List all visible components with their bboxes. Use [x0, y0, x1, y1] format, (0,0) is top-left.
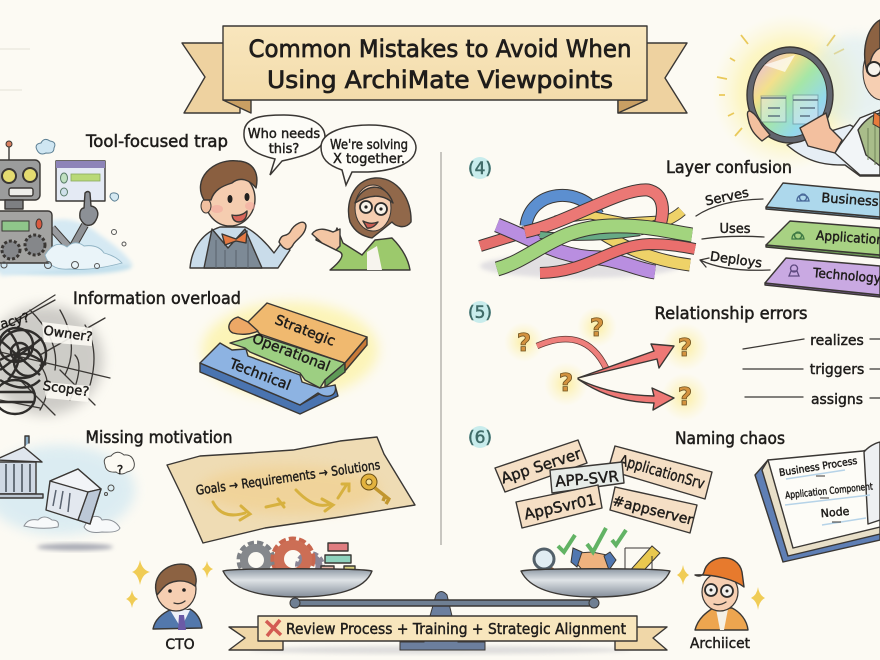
- label: architect: Archiicet: [690, 636, 750, 652]
- step number 6: (6): [468, 428, 492, 448]
- layer boards: [765, 183, 880, 297]
- bottom banner: [229, 616, 667, 650]
- puzzle labels: Operational: [250, 331, 332, 375]
- icon: tangled web of questions: [0, 295, 110, 415]
- step number 4: (4): [468, 159, 492, 179]
- right pan: [521, 569, 670, 597]
- icon: open reference book: Node: [820, 505, 850, 520]
- title banner: [182, 26, 687, 113]
- icon: tangled web of questions: Owner?: [42, 324, 93, 345]
- card: appsvr01: AppSvr01: [522, 491, 598, 523]
- panel: 6 naming chaos: [468, 426, 880, 562]
- puzzle labels: Technical: [226, 356, 293, 394]
- sparkles: [126, 560, 213, 608]
- relationship labels: assigns: [811, 392, 863, 408]
- icon: floating buildings: [0, 436, 135, 550]
- puzzle piece: operational: [230, 335, 345, 388]
- left pan: [223, 569, 372, 597]
- puzzle piece: technical: [200, 363, 338, 414]
- card: applicationsrv: ApplicationSrv: [617, 451, 707, 493]
- speech bubble: who needs this: [244, 115, 325, 175]
- question mark glows: [504, 307, 709, 421]
- heading: tool-focused trap: Tool-focused trap: [85, 132, 228, 152]
- banner main panel: [223, 26, 647, 100]
- icon: glowing rainbow mirror held by architect: [712, 14, 880, 176]
- puzzle labels: [226, 312, 337, 394]
- scroll text: Goals → Requirements → Solutions: [195, 458, 381, 499]
- arrow labels: serves uses deploys: Uses: [719, 222, 751, 237]
- question mark glows: ?: [559, 368, 573, 397]
- card: #appserver: #appserver: [611, 493, 695, 529]
- scale pivot: [400, 592, 485, 650]
- card: app server: App Server: [499, 444, 584, 487]
- panel: 1 tool-focused trap: [0, 115, 416, 276]
- panel: 5 relationship errors: [468, 301, 880, 421]
- banner left tail: [182, 43, 240, 113]
- icon: open reference book: [755, 442, 880, 562]
- label: cto: CTO: [165, 637, 195, 653]
- red tangled arrows: [537, 339, 674, 410]
- scroll arrows: [213, 484, 349, 520]
- puzzle piece: strategic: [248, 303, 367, 363]
- question mark glows: ?: [678, 333, 692, 362]
- card: app-svr: [550, 462, 624, 493]
- icon: man in vest and bow tie: [190, 161, 306, 268]
- speech bubble: we're solving x together: We're solving: [330, 138, 408, 153]
- scale beam: [298, 600, 590, 606]
- parchment scroll: [167, 437, 415, 543]
- icon: open reference book: Business Process: [778, 456, 858, 479]
- heading: information overload: Information overload: [73, 289, 241, 309]
- arrow labels: serves uses deploys: Serves: [704, 186, 750, 209]
- relationship labels: [743, 333, 880, 408]
- heading: missing motivation: Missing motivation: [86, 428, 232, 448]
- arrow labels: serves uses deploys: Deploys: [709, 249, 763, 272]
- relationship labels: triggers: [810, 362, 864, 378]
- icon: red cross: [266, 620, 281, 636]
- naming cards: [495, 440, 712, 533]
- speech bubble: who needs this: Who needs: [248, 127, 320, 142]
- title text: [248, 35, 632, 94]
- panel: 3 missing motivation: [0, 428, 415, 550]
- icon: robot in foam: [0, 139, 132, 276]
- sparkles: [677, 565, 765, 610]
- banner right tail: [618, 43, 687, 113]
- title text: Using ArchiMate Viewpoints: [267, 66, 613, 94]
- banner text: Review Process + Training + Strategic Alignment: [286, 620, 626, 638]
- board: business: Business: [821, 191, 879, 210]
- puzzle labels: Strategic: [273, 312, 337, 350]
- icon: tangled coloured ribbons: [480, 190, 695, 278]
- speech bubble: we're solving x together: X together.: [333, 152, 405, 167]
- heading: relationship errors: Relationship errors: [654, 304, 808, 324]
- question mark glows: ?: [678, 382, 692, 411]
- card: appsvr01: [516, 485, 602, 528]
- icon: floating buildings: ?: [117, 463, 123, 477]
- arrow labels: serves uses deploys: [696, 186, 770, 272]
- tools on right pan: [534, 528, 660, 582]
- icon: layered puzzle pieces: [200, 302, 378, 414]
- icon: golden key: [361, 474, 390, 504]
- title text: Common Mistakes to Avoid When: [248, 35, 632, 63]
- tools on left pan: [239, 539, 355, 579]
- heading: naming chaos: Naming chaos: [675, 429, 785, 449]
- balance scale: [223, 528, 670, 654]
- question mark glows: ?: [517, 328, 531, 357]
- panel: 2 information overload: [0, 289, 378, 415]
- figure: cto: [126, 560, 213, 653]
- speech bubble: who needs this: this?: [269, 142, 299, 157]
- icon: tangled web of questions: Scope?: [42, 379, 90, 400]
- figure: architect: [677, 558, 765, 652]
- speech bubble: we're solving x together: [321, 125, 416, 185]
- icon: woman with glasses: [312, 178, 411, 270]
- relationship labels: realizes: [810, 333, 864, 349]
- heading: layer confusion: Layer confusion: [666, 158, 792, 178]
- card: app-svr: APP-SVR: [555, 467, 619, 491]
- panel: 4 layer confusion: [468, 157, 880, 297]
- question mark glows: ?: [590, 313, 604, 342]
- step number 5: (5): [468, 303, 492, 323]
